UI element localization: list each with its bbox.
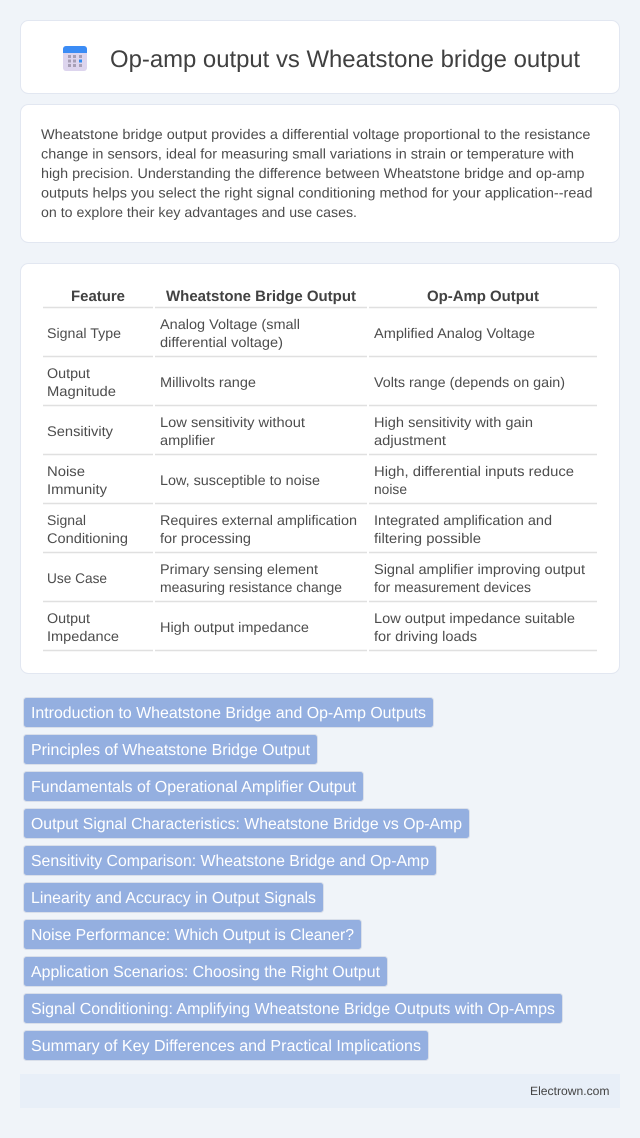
link: linearity (24, 882, 324, 912)
row: output magnitude: Millivolts range (160, 374, 256, 390)
row: output magnitude: Magnitude (47, 383, 116, 399)
link: application scenarios (24, 956, 388, 986)
intro text: change in sensors, ideal for measuring small variations in strain or temperature with (41, 146, 574, 162)
intro text: outputs helps you select the right signal conditioning method for your application--read (41, 184, 592, 200)
row: sensitivity: High sensitivity with gain (374, 414, 533, 430)
row: noise immunity: Immunity (47, 481, 107, 497)
row: output magnitude (47, 365, 565, 399)
row: signal type: Analog Voltage (small (160, 316, 300, 332)
link: fundamentals: Fundamentals of Operational Amplifier Output (31, 779, 357, 796)
row: output impedance: Output (47, 610, 90, 626)
link: noise performance (24, 920, 362, 950)
title: Op-amp output vs Wheatstone bridge output (110, 46, 580, 73)
panel: comparison table (20, 264, 620, 674)
row: output magnitude: Output (47, 365, 90, 381)
intro text: on to explore their key advantages and use cases. (41, 204, 357, 220)
link: noise performance: Noise Performance: Which Output is Cleaner? (31, 927, 354, 944)
intro text: Wheatstone bridge output provides a differential voltage proportional to the resistance (41, 126, 591, 142)
link: fundamentals (24, 772, 364, 802)
row: output impedance: for driving loads (374, 628, 477, 644)
row: signal conditioning: Conditioning (47, 530, 128, 546)
row: signal type: Signal Type (47, 325, 121, 341)
row: sensitivity: Sensitivity (47, 423, 113, 439)
panel: title header (20, 20, 620, 94)
icon: calendar grid (63, 46, 87, 71)
row: signal conditioning: for processing (160, 530, 251, 546)
intro text (41, 126, 592, 220)
row: noise immunity: Low, susceptible to noise (160, 472, 320, 488)
section links list (24, 698, 562, 1060)
row: use case: for measurement devices (374, 579, 531, 595)
row: use case: Primary sensing element (160, 561, 318, 577)
link: signal conditioning (24, 994, 562, 1024)
row: output magnitude: Volts range (depends on gain) (374, 374, 565, 390)
row: output impedance: Low output impedance suitable (374, 610, 575, 626)
link: principles: Principles of Wheatstone Bridge Output (31, 742, 311, 759)
row: signal conditioning (47, 512, 552, 546)
row: noise immunity: noise (374, 481, 407, 497)
link: signal conditioning: Signal Conditioning: Amplifying Wheatstone Bridge Outputs with Op-Amps (31, 1001, 555, 1018)
intro text: high precision. Understanding the difference between Wheatstone bridge and op-amp (41, 165, 585, 181)
row: signal conditioning: Signal (47, 512, 86, 528)
panel: introduction (20, 104, 620, 242)
table header: Op-Amp Output (427, 288, 539, 305)
link: linearity: Linearity and Accuracy in Output Signals (31, 890, 316, 907)
table header: Wheatstone Bridge Output (166, 288, 356, 305)
row: signal conditioning: Integrated amplification and (374, 512, 552, 528)
link: summary (24, 1030, 428, 1060)
row: sensitivity: Low sensitivity without (160, 414, 305, 430)
row: sensitivity (47, 414, 533, 448)
table header (71, 288, 539, 305)
link: signal characteristics (24, 808, 470, 838)
row: noise immunity (47, 463, 574, 497)
row: noise immunity: High, differential inputs reduce (374, 463, 574, 479)
row: noise immunity: Noise (47, 463, 85, 479)
row: signal conditioning: filtering possible (374, 530, 481, 546)
row: use case (47, 561, 585, 595)
row: output impedance: Impedance (47, 628, 119, 644)
row: use case: Signal amplifier improving output (374, 561, 585, 577)
row: use case: measuring resistance change (160, 579, 342, 595)
row: sensitivity: adjustment (374, 432, 446, 448)
link: sensitivity comparison: Sensitivity Comparison: Wheatstone Bridge and Op-Amp (31, 853, 429, 870)
link: introduction: Introduction to Wheatstone Bridge and Op-Amp Outputs (31, 705, 426, 722)
row: signal conditioning: Requires external amplification (160, 512, 357, 528)
footer: Electrown.com (530, 1084, 610, 1098)
link: summary: Summary of Key Differences and Practical Implications (31, 1038, 421, 1055)
row: output impedance (47, 610, 575, 644)
link: principles (24, 734, 318, 764)
link: introduction (24, 698, 434, 728)
row: sensitivity: amplifier (160, 432, 215, 448)
row: signal type: differential voltage) (160, 334, 283, 350)
footer (20, 1074, 620, 1108)
link: application scenarios: Application Scenarios: Choosing the Right Output (31, 964, 381, 981)
row: signal type: Amplified Analog Voltage (374, 325, 535, 341)
row: use case: Use Case (47, 570, 107, 586)
link: signal characteristics: Output Signal Characteristics: Wheatstone Bridge vs Op-Amp (31, 816, 462, 833)
link: sensitivity comparison (24, 846, 436, 876)
row: signal type (47, 316, 535, 350)
row: output impedance: High output impedance (160, 619, 309, 635)
table header: Feature (71, 288, 125, 305)
